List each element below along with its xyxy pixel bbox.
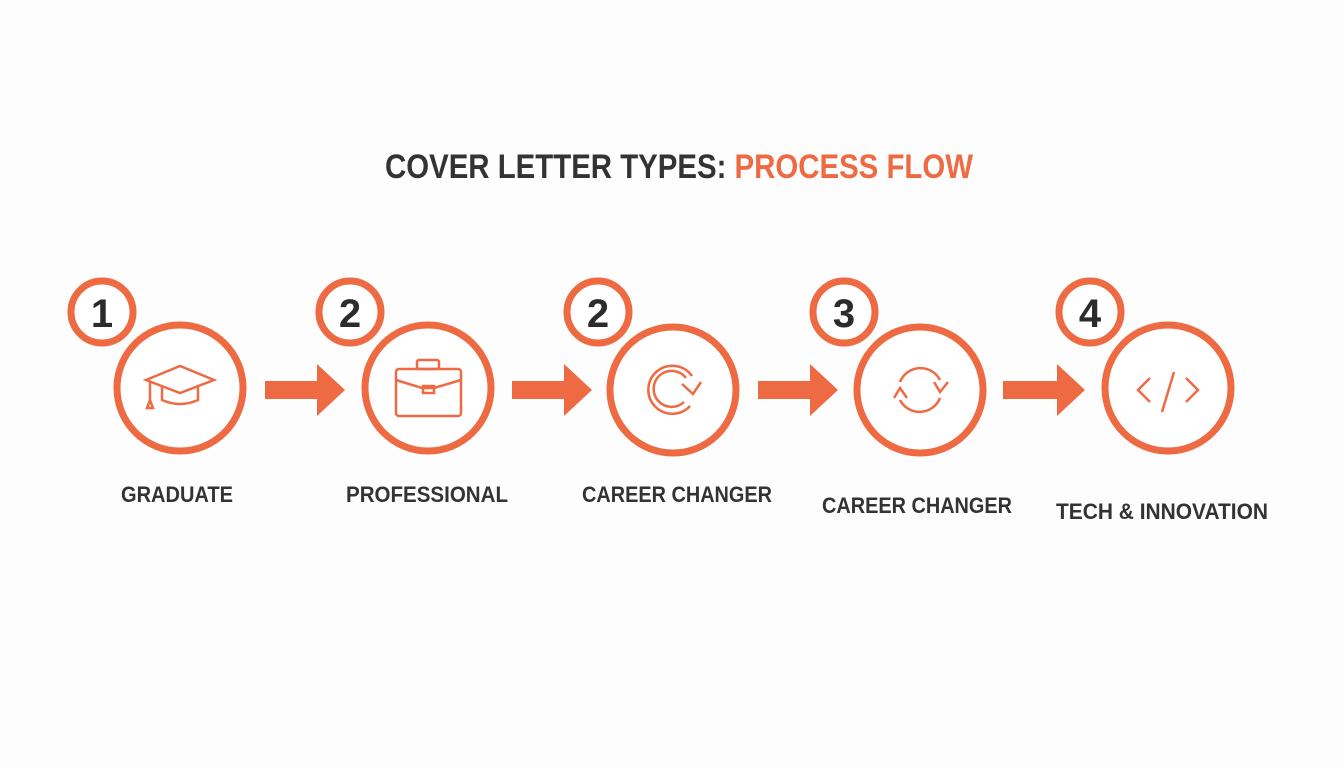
step 2: professional bbox=[319, 281, 508, 507]
arrow 1 bbox=[265, 364, 345, 416]
label: CAREER CHANGER bbox=[582, 482, 772, 507]
icon circle: code bbox=[1105, 325, 1231, 451]
step 1: graduate bbox=[71, 281, 243, 507]
number badge 2 (repeat) bbox=[567, 281, 629, 343]
label: PROFESSIONAL bbox=[346, 482, 508, 507]
label: TECH & INNOVATION bbox=[1056, 499, 1268, 524]
icon circle: briefcase bbox=[365, 325, 491, 451]
number badge 1: 1 bbox=[91, 292, 113, 336]
number badge 2: 2 bbox=[339, 292, 361, 336]
icon circle: graduation cap bbox=[117, 325, 243, 451]
number badge 3: 3 bbox=[833, 292, 855, 336]
number badge 2 bbox=[319, 281, 381, 343]
number badge 4: 4 bbox=[1079, 292, 1102, 336]
number badge 3 bbox=[813, 281, 875, 343]
step 3: career changer bbox=[567, 281, 772, 507]
arrow 2 bbox=[512, 364, 592, 416]
step 5: tech & innovation bbox=[1056, 281, 1268, 524]
label: GRADUATE bbox=[121, 482, 233, 507]
label: CAREER CHANGER bbox=[822, 493, 1012, 518]
icon circle: sync arrows bbox=[857, 327, 983, 453]
number badge 1 bbox=[71, 281, 133, 343]
arrow 3 bbox=[758, 364, 838, 416]
step 4: career changer bbox=[813, 281, 1012, 518]
number badge 4 bbox=[1059, 281, 1121, 343]
arrow 4 bbox=[1003, 364, 1085, 416]
title: COVER LETTER TYPES: PROCESS FLOW bbox=[385, 148, 974, 186]
icon circle: rotate bbox=[610, 327, 736, 453]
number badge 2 (repeat): 2 bbox=[587, 292, 609, 336]
